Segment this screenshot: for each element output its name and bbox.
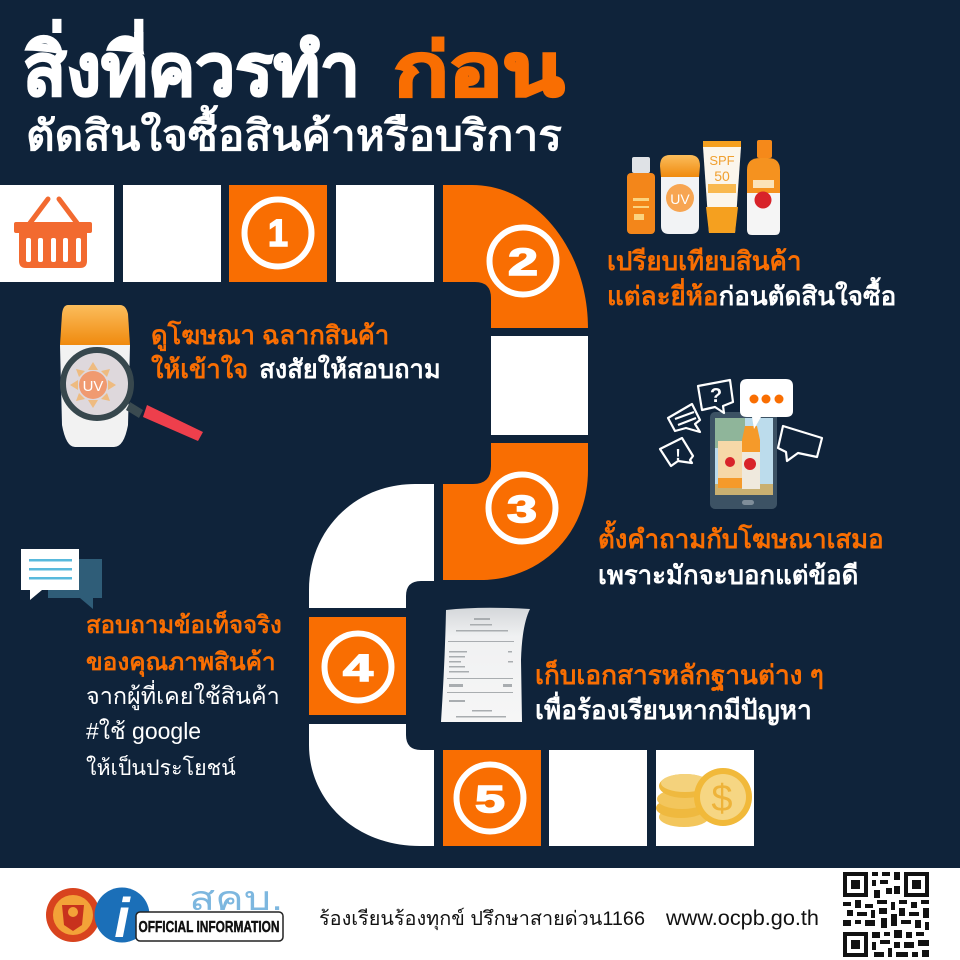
icon: bottle under magnifier: UV xyxy=(83,378,103,395)
text: step 4: #ใช้ google xyxy=(86,718,201,744)
step number 3: 3 xyxy=(507,489,537,531)
icon: gold coins: $ xyxy=(711,778,733,820)
title xyxy=(23,19,564,159)
icon: sunscreen bottles: 50 xyxy=(714,168,730,184)
icon: receipt xyxy=(441,608,530,722)
logo: seal xyxy=(46,888,100,942)
text: step 2 xyxy=(607,246,896,311)
icon: gold coins xyxy=(656,768,752,827)
board path xyxy=(0,185,754,846)
text: step 2: แต่ละยี่ห้อก่อนตัดสินใจซื้อ xyxy=(607,276,896,311)
icon: shopping basket xyxy=(14,199,92,268)
step number 1 xyxy=(244,200,312,266)
logo: info i xyxy=(94,886,150,949)
text: step 4 xyxy=(86,610,282,780)
QR code xyxy=(843,872,929,957)
logo: official information: สคบ. xyxy=(189,880,283,918)
logo: official information: OFFICIAL INFORMATION xyxy=(138,919,280,936)
logo: official information xyxy=(136,880,283,941)
website: www.ocpb.go.th xyxy=(665,907,819,930)
text: step 5: เพื่อร้องเรียนหากมีปัญหา xyxy=(535,691,812,726)
icon: chat bubbles xyxy=(21,549,102,609)
icon: sunscreen bottles: SPF xyxy=(709,153,735,168)
step number 3 xyxy=(488,474,556,542)
icon: tablet with speech bubbles: ? xyxy=(710,385,722,407)
icon: sunscreen bottles xyxy=(627,140,780,235)
step number 4 xyxy=(324,634,392,700)
text: step 3: ตั้งคำถามกับโฆษณาเสมอ xyxy=(598,520,884,554)
step number 5: 5 xyxy=(475,779,505,821)
text: step 4: ให้เป็นประโยชน์ xyxy=(86,753,236,780)
title: ตัดสินใจซื้อสินค้าหรือบริการ xyxy=(26,104,562,159)
icon: tablet with speech bubbles: ! xyxy=(675,447,681,464)
title: ก่อน xyxy=(394,31,564,111)
step number 4: 4 xyxy=(343,648,373,690)
step number 1: 1 xyxy=(268,213,288,255)
icon: tablet with speech bubbles xyxy=(660,379,822,509)
text: step 5: เก็บเอกสารหลักฐานต่าง ๆ xyxy=(535,658,824,693)
text: step 4: ของคุณภาพสินค้า xyxy=(86,649,276,678)
icon: sunscreen bottles: UV xyxy=(670,191,690,207)
text: step 2: เปรียบเทียบสินค้า xyxy=(607,246,802,276)
text: step 3: เพราะมักจะบอกแต่ข้อดี xyxy=(598,561,858,590)
text: step 1 xyxy=(151,320,441,384)
step number 2: 2 xyxy=(508,242,538,284)
text: step 4: จากผู้ที่เคยใช้สินค้า xyxy=(86,680,280,711)
text: step 1: ดูโฆษณา ฉลากสินค้า xyxy=(151,320,389,352)
logo: info i: i xyxy=(114,886,131,949)
step number 5 xyxy=(456,764,524,832)
text: step 5 xyxy=(535,658,824,726)
icon: bottle under magnifier xyxy=(60,305,203,447)
text: step 4: สอบถามข้อเท็จจริง xyxy=(86,610,282,639)
hotline text: ร้องเรียนร้องทุกข์ ปรึกษาสายด่วน1166 xyxy=(319,907,645,931)
title: สิ่งที่ควรทำ xyxy=(23,19,360,111)
text: step 1: ให้เข้าใจ สงสัยให้สอบถาม xyxy=(151,354,441,384)
step number 2 xyxy=(490,228,556,294)
text: step 3 xyxy=(598,520,884,590)
footer band xyxy=(0,868,960,960)
